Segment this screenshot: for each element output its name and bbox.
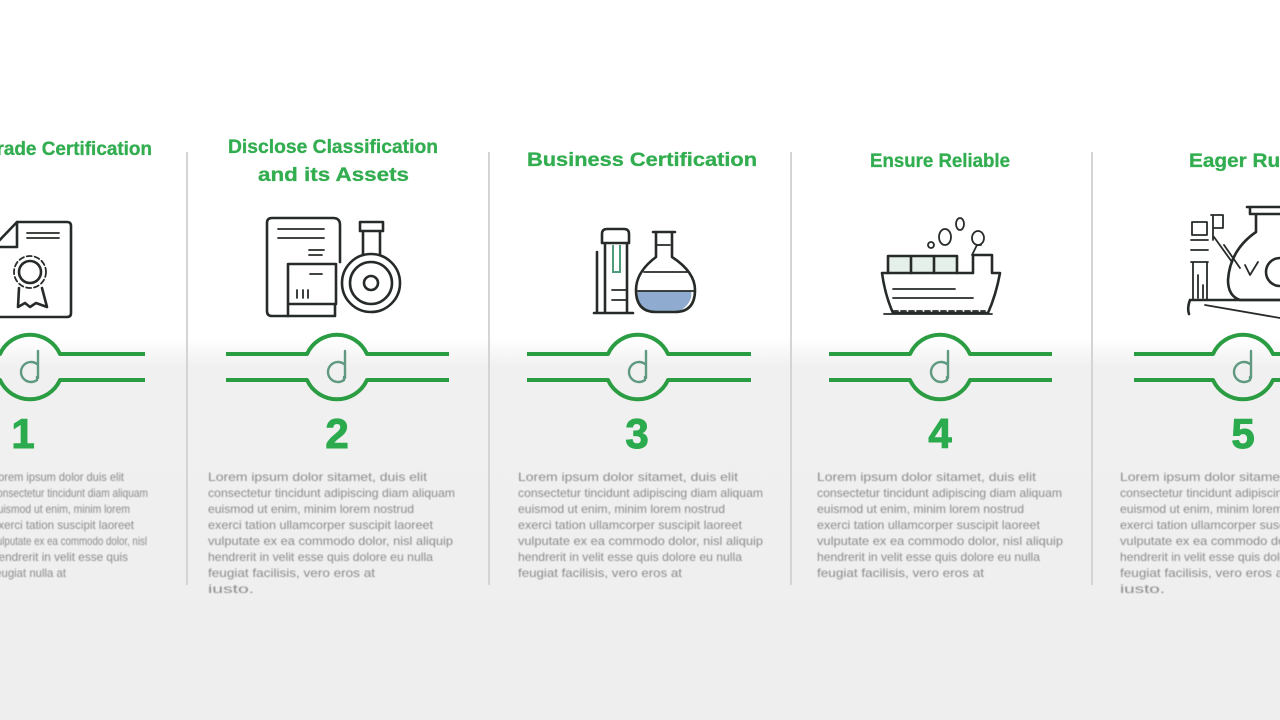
panel: step 2	[208, 137, 455, 596]
body text: step 2: feugiat facilisis, vero eros at	[208, 566, 376, 580]
body text: step 4: hendrerit in velit esse quis dolore eu nulla	[817, 550, 1040, 564]
title: step 2: Disclose Classification	[228, 137, 438, 158]
body text: step 4: exerci tation ullamcorper suscipit laoreet	[817, 518, 1041, 532]
body text: step 3: consectetur tincidunt adipiscing diam aliquam	[518, 486, 763, 500]
panel: step 4	[817, 151, 1063, 580]
body text: step 3: exerci tation ullamcorper suscipit laoreet	[518, 518, 743, 532]
icon: document and flask	[267, 218, 400, 316]
connector: step 3	[527, 335, 751, 399]
panel: step 1	[0, 139, 152, 580]
body text: step 3: vulputate ex ea commodo dolor, nisl aliquip	[518, 534, 763, 548]
title: step 3: Business Certification	[527, 150, 757, 171]
panel: step 3	[518, 150, 763, 580]
title: step 2: and its Assets	[258, 165, 409, 186]
body text: step 3	[518, 470, 763, 580]
body text: step 3: euismod ut enim, minim lorem nostrud	[518, 502, 725, 516]
title: step 4: Ensure Reliable	[870, 151, 1010, 172]
body text: step 3: hendrerit in velit esse quis dolore eu nulla	[518, 550, 742, 564]
body text: step 4	[817, 470, 1063, 580]
body text: step 4: euismod ut enim, minim lorem nostrud	[817, 502, 1024, 516]
icon: lab equipment	[1188, 207, 1280, 318]
icon: test tube and flask	[594, 229, 695, 313]
connector: step 4	[829, 335, 1052, 399]
body text: step 4: vulputate ex ea commodo dolor, nisl aliquip	[817, 534, 1063, 548]
icon: cargo ship	[882, 218, 1000, 314]
number 1: 1	[11, 410, 35, 457]
number 4: 4	[928, 410, 952, 457]
body text: step 4: Lorem ipsum dolor sitamet, duis elit	[817, 470, 1037, 484]
number 5: 5	[1231, 410, 1255, 457]
body text: step 2: hendrerit in velit esse quis dolore eu nulla	[208, 550, 433, 564]
connector: step 5	[1134, 335, 1280, 399]
body text: step 1	[0, 470, 148, 580]
body text: step 2: consectetur tincidunt adipiscing diam aliquam	[208, 486, 455, 500]
body text: step 5	[1120, 470, 1280, 596]
title: step 2	[228, 137, 438, 186]
connector: step 2	[226, 335, 449, 399]
connector: step 1	[0, 335, 145, 399]
number 2: 2	[325, 410, 349, 457]
body text: step 3: feugiat facilisis, vero eros at	[518, 566, 683, 580]
panel: step 5	[1120, 151, 1280, 596]
body text: step 2: iusto.	[208, 582, 254, 596]
body text: step 4: consectetur tincidunt adipiscing diam aliquam	[817, 486, 1062, 500]
body text: step 3: Lorem ipsum dolor sitamet, duis elit	[518, 470, 739, 484]
body text: step 2: vulputate ex ea commodo dolor, nisl aliquip	[208, 534, 453, 548]
body text: step 2: euismod ut enim, minim lorem nostrud	[208, 502, 414, 516]
icon: certificate document	[0, 222, 71, 317]
body text: step 2: Lorem ipsum dolor sitamet, duis elit	[208, 470, 428, 484]
number 3: 3	[625, 410, 649, 457]
body text: step 5: feugiat facilisis, vero eros at	[1120, 566, 1280, 580]
body text: step 2	[208, 470, 455, 596]
body text: step 4: feugiat facilisis, vero eros at	[817, 566, 985, 580]
body text: step 2: exerci tation ullamcorper suscipit laoreet	[208, 518, 434, 532]
body text: step 5: iusto.	[1120, 582, 1165, 596]
